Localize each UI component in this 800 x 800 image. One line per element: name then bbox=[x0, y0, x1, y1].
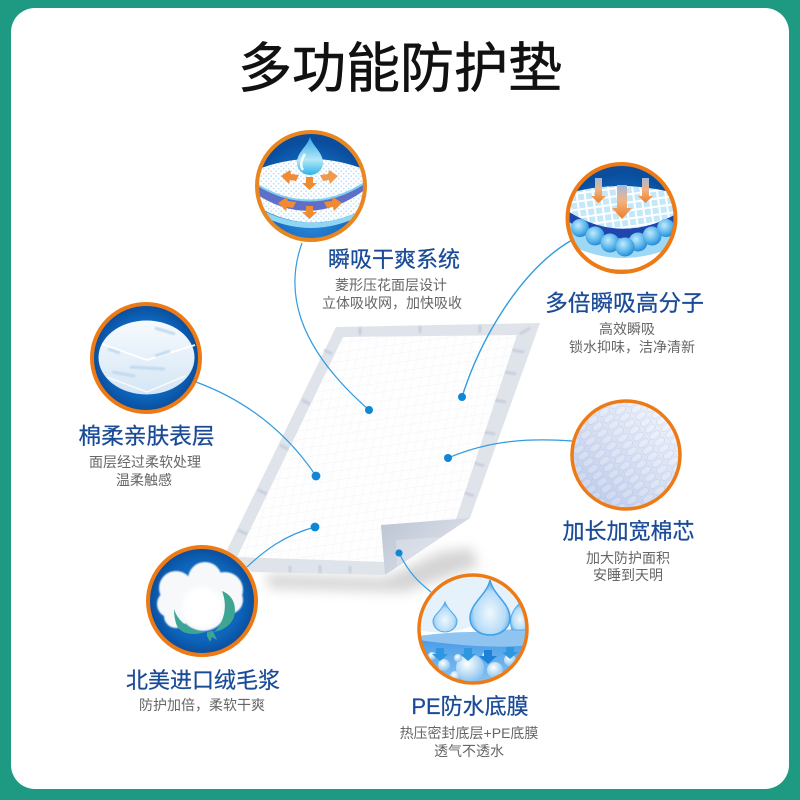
leader: polymer bbox=[462, 240, 572, 397]
text block: core: 加长加宽棉芯 bbox=[562, 519, 695, 544]
pad quilted surface bbox=[237, 335, 517, 562]
leader: absorption system bbox=[295, 243, 369, 410]
icon: cotton boll bbox=[147, 546, 257, 656]
dot: PE film bbox=[395, 549, 403, 557]
text block: fluff pulp: 防护加倍，柔软干爽 bbox=[139, 697, 265, 713]
icon: extended cotton core texture bbox=[572, 401, 680, 509]
text block: absorption system: 瞬吸干爽系统 bbox=[328, 247, 460, 272]
text block: soft surface: 温柔触感 bbox=[116, 472, 172, 488]
product: absorbent pad bbox=[227, 323, 540, 592]
leader: core bbox=[448, 440, 572, 458]
text block: PE film: 热压密封底层+PE底膜 bbox=[400, 725, 538, 741]
text block: core bbox=[562, 519, 695, 583]
text block: fluff pulp: 北美进口绒毛浆 bbox=[126, 668, 280, 693]
icon: PE waterproof film bbox=[418, 574, 530, 690]
title: 多功能防护垫 bbox=[238, 39, 562, 99]
text block: polymer: 锁水抑味，洁净清新 bbox=[569, 339, 695, 355]
text block: core: 安睡到天明 bbox=[593, 567, 663, 583]
leader: PE film bbox=[399, 553, 431, 592]
text block: soft surface: 面层经过柔软处理 bbox=[89, 454, 201, 470]
leader lines and dots bbox=[196, 240, 572, 592]
text block: PE film: 透气不透水 bbox=[434, 743, 504, 759]
text block: polymer: 高效瞬吸 bbox=[599, 321, 655, 337]
leader: fluff pulp bbox=[247, 527, 315, 567]
dot: soft surface bbox=[312, 472, 320, 480]
pad outer border bbox=[227, 323, 540, 575]
pad border creases bbox=[238, 325, 530, 573]
text block: PE film bbox=[400, 694, 538, 759]
dot: absorption system bbox=[365, 406, 373, 414]
dot: core bbox=[444, 454, 452, 462]
text block: absorption system: 立体吸收网，加快吸收 bbox=[322, 295, 462, 311]
text block: soft surface: 棉柔亲肤表层 bbox=[78, 423, 215, 449]
dot: polymer bbox=[458, 393, 466, 401]
text block: core: 加大防护面积 bbox=[586, 550, 670, 566]
dot: fluff pulp bbox=[311, 523, 319, 531]
text block: soft surface bbox=[78, 423, 215, 488]
text block: fluff pulp bbox=[126, 668, 280, 713]
text block: absorption system: 菱形压花面层设计 bbox=[335, 277, 447, 293]
pad shadow bbox=[265, 548, 478, 592]
icon: instant absorption layers bbox=[255, 130, 367, 242]
text block: PE film: PE防水底膜 bbox=[411, 694, 529, 719]
text block: polymer: 多倍瞬吸高分子 bbox=[545, 290, 704, 316]
folded corner bbox=[381, 518, 470, 575]
text block: absorption system bbox=[322, 247, 462, 311]
icon: polymer beads bbox=[565, 162, 679, 276]
icon: soft surface sheet bbox=[91, 303, 201, 413]
text block: polymer bbox=[545, 290, 704, 355]
leader: soft surface bbox=[196, 382, 316, 476]
